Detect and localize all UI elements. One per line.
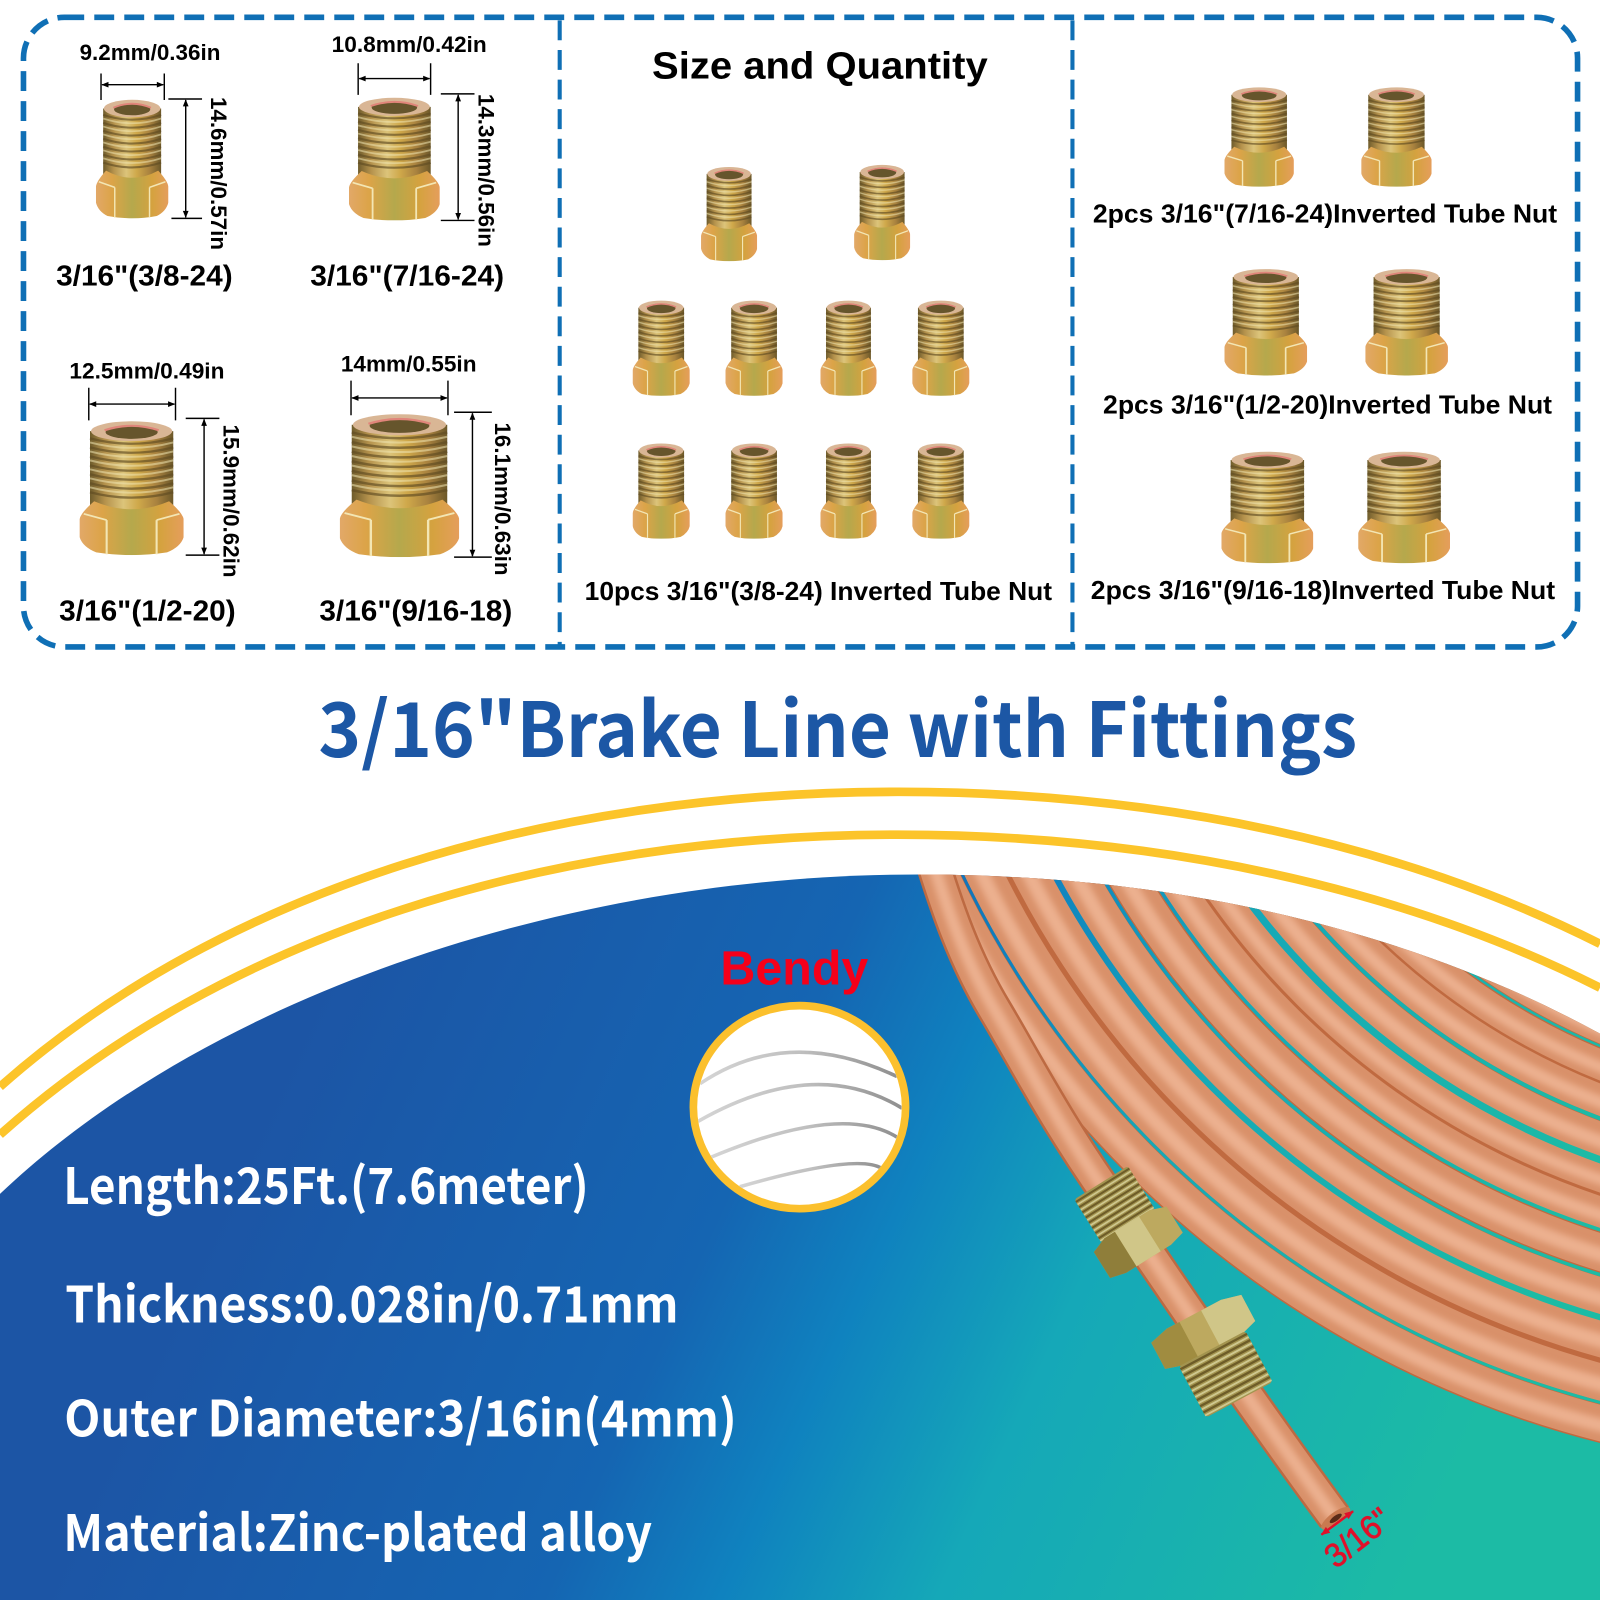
spec: thickness: Thickness:0.028in/0.71mm [65, 1265, 679, 1337]
nut 9/16-18 with dimensions [340, 351, 515, 576]
nut 9/16-18 with dimensions: 14mm/0.55in [341, 351, 477, 376]
spec: material: Material:Zinc-plated alloy [63, 1494, 652, 1566]
heading: bendy: Bendy [720, 943, 869, 996]
caption: 9/16-18: 2pcs 3/16"(9/16-18)Inverted Tube Nut [1091, 577, 1556, 605]
nut label 1/2-20: 3/16"(1/2-20) [59, 595, 236, 627]
nut 3/8-24 with dimensions: 9.2mm/0.36in [80, 40, 220, 65]
panel: nut dimensions [56, 32, 515, 627]
caption: 1/2-20: 2pcs 3/16"(1/2-20)Inverted Tube Nut [1103, 391, 1553, 419]
caption: 7/16-24: 2pcs 3/16"(7/16-24)Inverted Tube Nut [1093, 200, 1558, 228]
nut 7/16-24 with dimensions: 14.3mm/0.56in [474, 94, 499, 247]
yellow arcs [0, 792, 1600, 1135]
lead tube [931, 855, 1335, 1517]
panel: fittings frame [23, 17, 1578, 647]
heading: size and quantity: Size and Quantity [652, 45, 988, 87]
copper tube coil [941, 874, 1600, 1443]
gradient dome background [0, 874, 1600, 1600]
nut 7/16-24 with dimensions [332, 32, 499, 247]
pair of 9/16-18 nuts [1221, 452, 1450, 563]
caption: 10pcs: 10pcs 3/16"(3/8-24) Inverted Tube Nut [585, 578, 1053, 606]
icon: bendy tube circle [693, 1006, 906, 1209]
nut 3/8-24 with dimensions: 14.6mm/0.57in [206, 97, 231, 250]
nut 1/2-20 with dimensions: 12.5mm/0.49in [69, 359, 224, 384]
pair of 1/2-20 nuts [1224, 269, 1448, 376]
nut 9/16-18 with dimensions: 16.1mm/0.63in [490, 422, 515, 576]
nut label 3/8-24: 3/16"(3/8-24) [56, 261, 233, 293]
nut label 9/16-18: 3/16"(9/16-18) [319, 595, 512, 627]
pair of 7/16-24 nuts [1224, 87, 1432, 187]
nut label 7/16-24: 3/16"(7/16-24) [310, 261, 504, 293]
panel: size and quantity [585, 45, 1053, 606]
spec: outer diameter: Outer Diameter:3/16in(4mm) [64, 1380, 737, 1452]
nut 1/2-20 with dimensions: 15.9mm/0.62in [218, 424, 243, 578]
lower fitting [1149, 1290, 1284, 1424]
nut 7/16-24 with dimensions: 10.8mm/0.42in [332, 32, 487, 57]
callout: 3/16 diameter: 3/16" [1318, 1501, 1399, 1576]
tube tip [1318, 1503, 1353, 1534]
panel: pairs of nuts [1091, 87, 1558, 605]
nut 1/2-20 with dimensions [69, 359, 243, 578]
upper fitting [1065, 1160, 1185, 1282]
title: 3/16"Brake Line with Fittings [318, 669, 1357, 779]
ten small nuts [633, 165, 969, 539]
spec: length: Length:25Ft.(7.6meter) [63, 1147, 589, 1219]
nut 3/8-24 with dimensions [80, 40, 231, 250]
